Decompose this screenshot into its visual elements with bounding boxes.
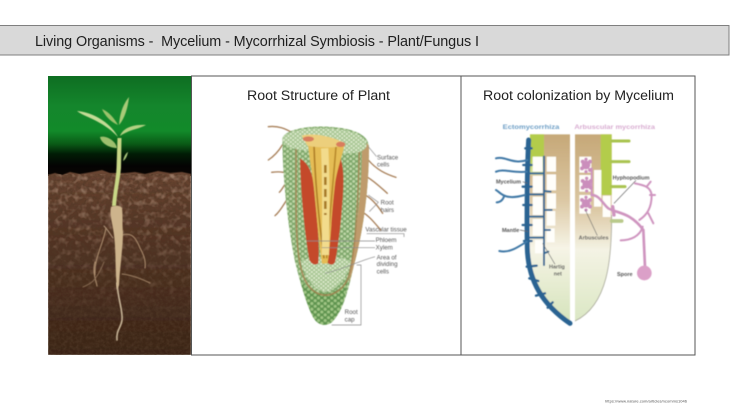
plant stem bbox=[112, 138, 122, 206]
colonization labels: Hartig bbox=[549, 265, 565, 271]
spore bbox=[637, 266, 652, 280]
plant leaves bbox=[77, 97, 146, 161]
yellow xylem core bbox=[308, 142, 344, 264]
green tabs bbox=[612, 141, 629, 187]
soil bbox=[48, 170, 191, 355]
root labels: dividing bbox=[377, 261, 398, 268]
root labels: Xylem bbox=[376, 244, 393, 251]
root labels: cells bbox=[377, 162, 389, 169]
root cap bbox=[300, 278, 348, 325]
top vascular bundle bbox=[302, 135, 345, 147]
root labels bbox=[345, 155, 407, 323]
arbuscules bbox=[580, 158, 593, 212]
arbuscular root half bbox=[575, 134, 612, 321]
root labels: Area of bbox=[377, 254, 397, 261]
leader lines bbox=[307, 147, 404, 325]
colonization labels: Spore bbox=[617, 272, 633, 278]
root labels: Root bbox=[381, 200, 394, 207]
panel frames bbox=[192, 76, 695, 355]
diagram: root colonization bbox=[496, 124, 655, 323]
red phloem strands bbox=[300, 158, 343, 265]
mycelium network bbox=[496, 140, 570, 323]
root hairs bbox=[268, 126, 396, 230]
diagram: root structure bbox=[268, 126, 407, 325]
heading: arbuscular mycorrhiza: Arbuscular mycorrhiza bbox=[574, 124, 655, 131]
top cut face bbox=[282, 128, 367, 153]
root labels: cap bbox=[345, 316, 355, 323]
root labels: Phloem bbox=[376, 237, 397, 244]
root labels: hairs bbox=[381, 207, 394, 214]
brown boundary arc bbox=[296, 148, 359, 295]
plant taproot bbox=[110, 206, 123, 290]
title bar bbox=[0, 26, 729, 55]
heading: root structure: Root Structure of Plant bbox=[247, 88, 390, 104]
colonization labels: Mantle bbox=[502, 228, 519, 234]
root labels: Vascular tissue bbox=[365, 226, 407, 233]
root labels: Surface bbox=[377, 155, 399, 162]
root labels: Root bbox=[345, 309, 358, 316]
colonization labels: net bbox=[554, 271, 562, 277]
root labels: cells bbox=[377, 268, 389, 275]
arbuscular hyphae bbox=[592, 168, 655, 267]
colonization labels: Arbuscules bbox=[579, 236, 609, 242]
colonization labels: Mycelium bbox=[496, 180, 521, 186]
dividing cells zone bbox=[301, 257, 352, 292]
root outer tan side bbox=[349, 143, 369, 283]
source url: https://www.nature.com/articles/ncomms1046 bbox=[605, 398, 688, 404]
title: Living Organisms - Mycelium - Mycorrhizal Symbiosis - Plant/Fungus I bbox=[35, 34, 479, 50]
heading: ectomycorrhiza: Ectomycorrhiza bbox=[503, 124, 560, 131]
leader lines bbox=[520, 180, 636, 264]
colonization labels: Hyphopodium bbox=[613, 175, 650, 181]
root body bbox=[282, 127, 369, 325]
plant roots bbox=[83, 226, 150, 340]
ectomycorrhiza root half bbox=[530, 134, 570, 323]
colonization labels bbox=[496, 175, 650, 278]
pale green tab bbox=[612, 215, 622, 226]
heading: root colonization: Root colonization by Mycelium bbox=[483, 88, 674, 104]
panel: plant seedling photo bbox=[48, 76, 191, 355]
